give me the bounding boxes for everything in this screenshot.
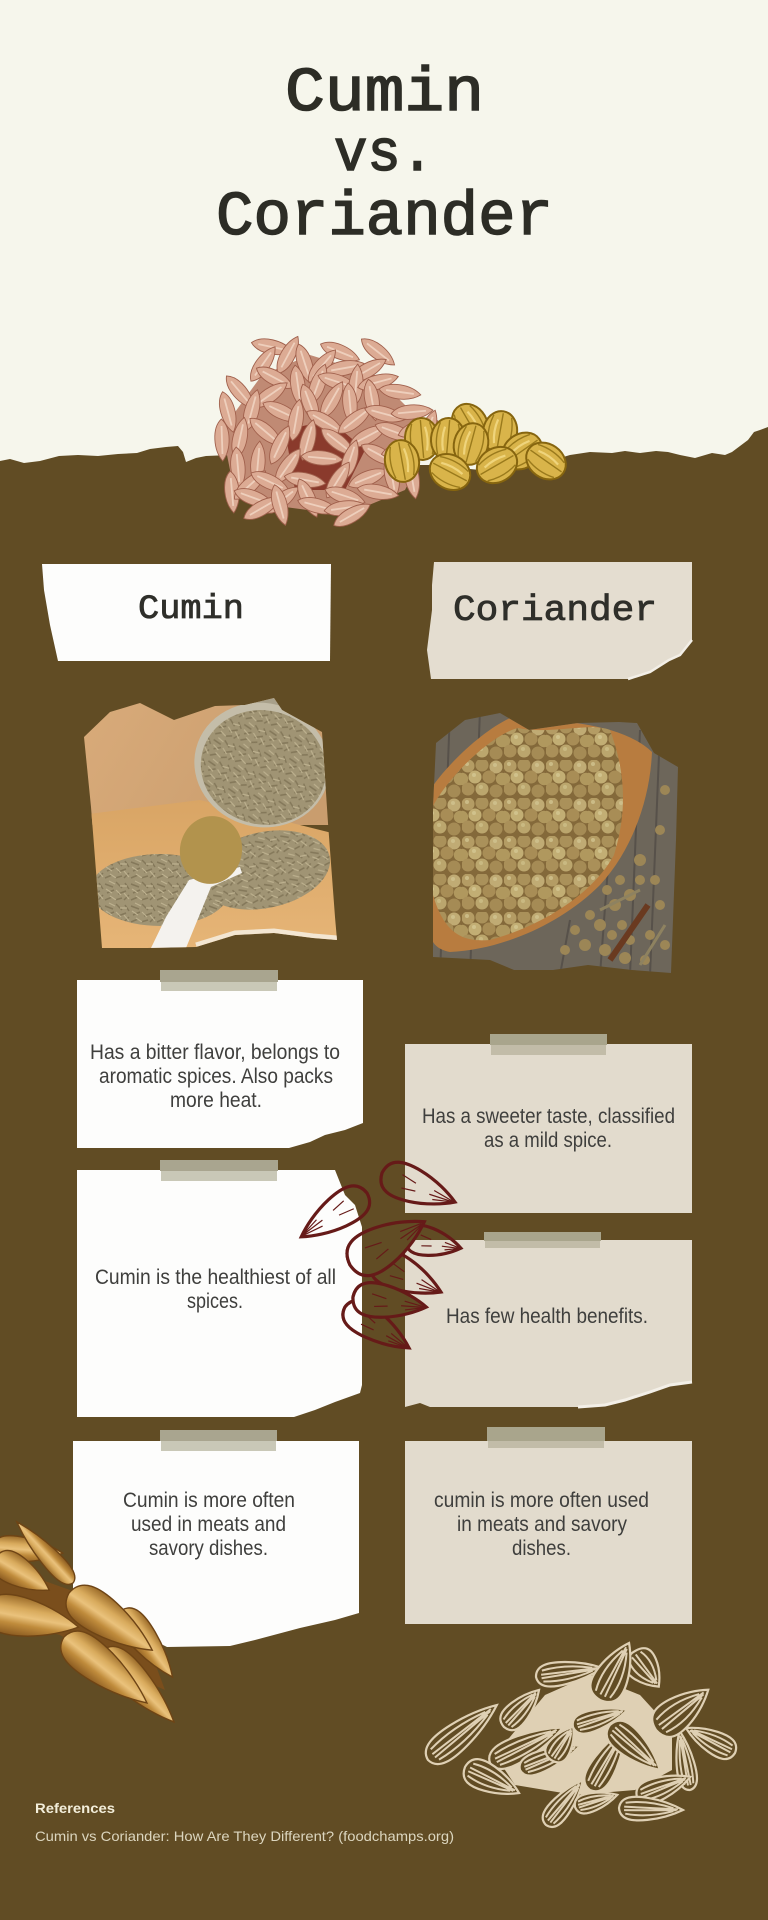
title: vs. [334,123,434,188]
tape [160,970,278,991]
title: Cumin [285,58,484,129]
note: cumin health [77,1160,362,1417]
text: Cumin is more often [123,1488,295,1512]
text: in meats and savory [457,1512,627,1536]
text: aromatic spices. Also packs [99,1064,333,1088]
tape [160,1160,278,1181]
illustration: cream sketched seed pile bottom right [419,1635,740,1832]
text: cumin is more often used [434,1488,649,1512]
text: Cumin is the healthiest of all [95,1265,336,1289]
text: Has a bitter flavor, belongs to [90,1040,340,1064]
text: Has a sweeter taste, classified [422,1104,675,1128]
note: coriander uses [405,1427,692,1624]
text [123,1488,295,1560]
text: dishes. [512,1536,571,1560]
illustration: cumin seed pile [214,333,442,532]
text: Has few health benefits. [446,1304,648,1328]
text [434,1488,649,1560]
text [422,1104,675,1152]
illustration: dark red outlined seeds [298,1160,464,1350]
header: Coriander [427,562,692,679]
tape [490,1034,607,1055]
text: spices. [187,1289,243,1313]
tape [160,1430,277,1451]
text: savory dishes. [149,1536,268,1560]
tape [487,1427,605,1448]
text [90,1040,340,1112]
photo: coriander in wooden spoon [430,710,680,975]
note: coriander flavor [405,1034,692,1213]
text: used in meats and [131,1512,286,1536]
photo: cumin in jar and spoon [80,688,343,950]
title [216,58,553,253]
note: cumin flavor [77,970,363,1148]
header: Cumin: Cumin [138,591,244,629]
header: Coriander: Coriander [453,590,657,631]
references heading: References [35,1801,115,1816]
header: Cumin [42,564,331,661]
text: as a mild spice. [484,1128,612,1152]
illustration: golden cumin seeds bottom left [0,1515,186,1734]
background: cream torn top section [0,0,768,471]
text [95,1265,336,1313]
references [35,1801,454,1844]
note: cumin uses [73,1430,359,1647]
note: coriander health [405,1232,692,1407]
illustration: coriander seed pile [382,397,573,497]
text: more heat. [170,1088,262,1112]
reference link: Cumin vs Coriander: How Are They Different? (foodchamps.org) [35,1828,454,1844]
tape [484,1232,601,1248]
title: Coriander [216,182,553,253]
